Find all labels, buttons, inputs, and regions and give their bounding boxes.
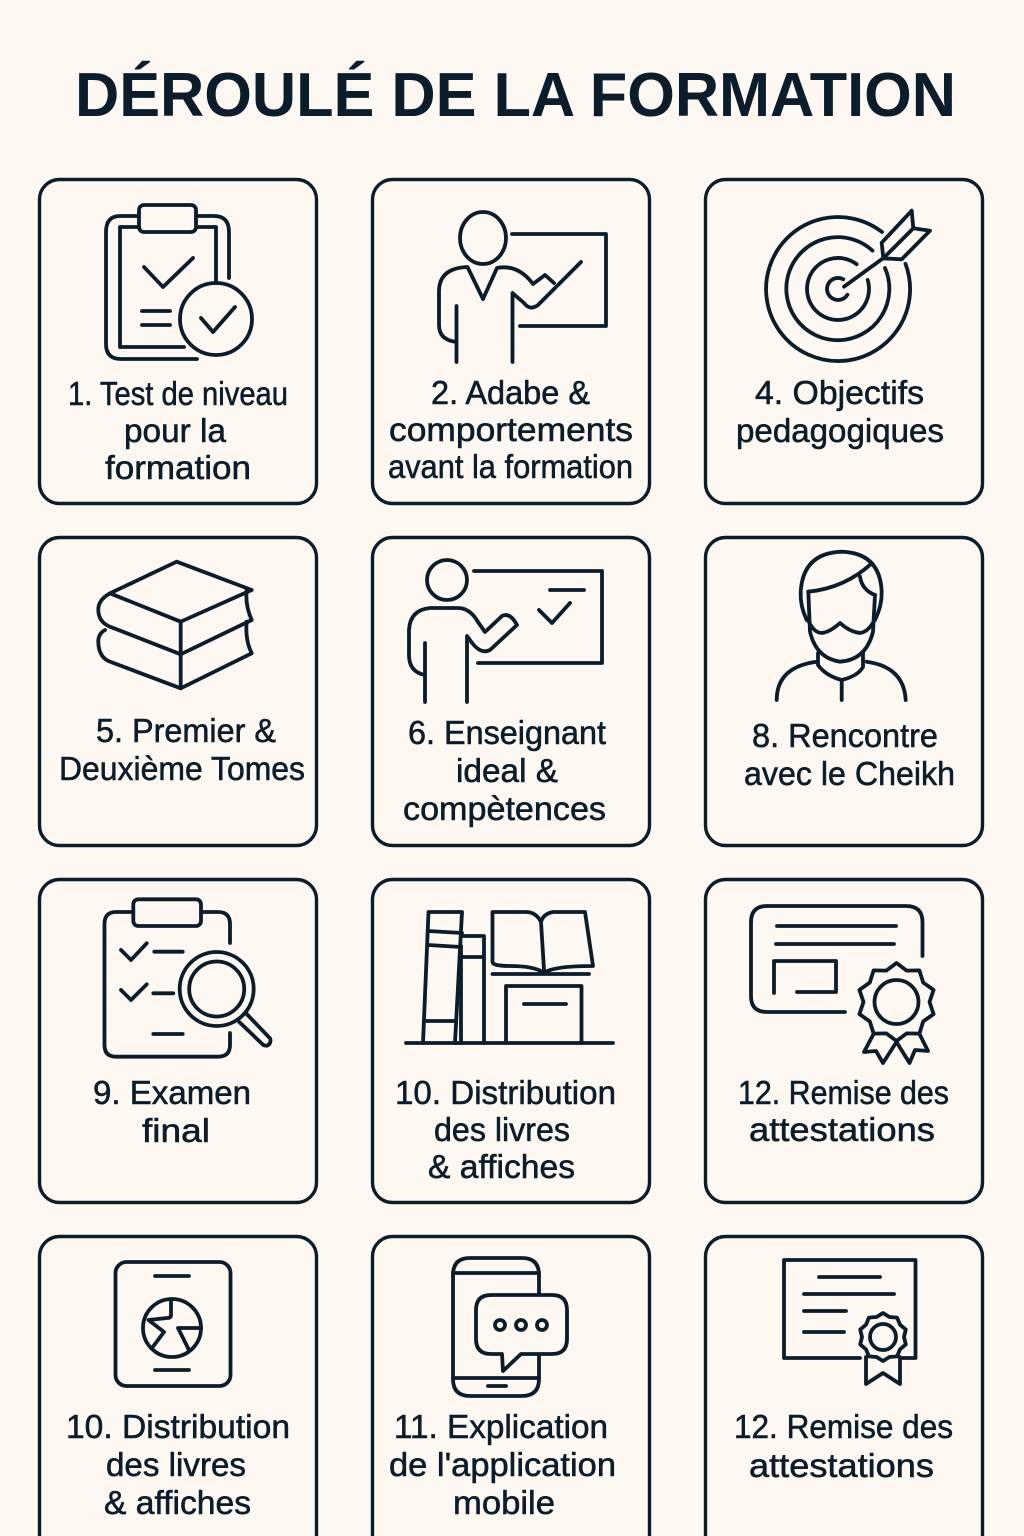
- label: objectifs pedagogiques: [736, 374, 944, 449]
- icon: books and open book on shelf: [406, 912, 613, 1043]
- label: distribution des livres: 10. Distribution: [395, 1074, 616, 1111]
- panel: 6. enseignant ideal: [372, 538, 650, 846]
- panel: 10. distribution des livres, tablet: [40, 1236, 316, 1536]
- label: explication de l'application mobile: mobile: [453, 1484, 555, 1521]
- label: rencontre avec le cheikh: [744, 717, 955, 792]
- icon: target with arrow: [766, 211, 930, 361]
- label: objectifs pedagogiques: pedagogiques: [736, 412, 944, 449]
- label: remise des attestations: 12. Remise des: [734, 1408, 953, 1445]
- label: enseignant ideal: [403, 714, 606, 827]
- icon: bearded man: [777, 552, 906, 700]
- panel: 9. examen final: [40, 880, 316, 1202]
- icon: checklist with magnifier: [104, 899, 270, 1057]
- label: test de niveau: 1. Test de niveau: [68, 375, 288, 412]
- label: distribution des livres: & affiches: [428, 1148, 575, 1185]
- label: objectifs pedagogiques: 4. Objectifs: [755, 374, 924, 411]
- panel: 11. explication de l'application mobile: [372, 1236, 650, 1536]
- label: explication de l'application mobile: de l'application: [389, 1446, 616, 1483]
- label: examen final: final: [142, 1112, 210, 1149]
- panel: 5. premier et deuxième tomes: [40, 538, 316, 846]
- label: adabe et comportements: 2. Adabe &: [431, 374, 590, 411]
- icon: stacked books: [98, 562, 252, 688]
- label: remise des attestations: attestations: [749, 1111, 935, 1148]
- label: distribution des livres: [395, 1074, 616, 1185]
- icon: phone with chat bubble: [453, 1258, 567, 1396]
- panel: 12. remise des attestations, diploma: [706, 1236, 982, 1536]
- label: distribution des livres: des livres: [434, 1111, 570, 1148]
- label: examen final: [93, 1074, 251, 1149]
- title: DÉROULÉ DE LA FORMATION: [75, 61, 956, 130]
- label: enseignant ideal: 6. Enseignant: [408, 714, 606, 751]
- label: enseignant ideal: ideal &: [456, 752, 558, 789]
- panel: 2. adabe et comportements: [372, 180, 650, 504]
- label: enseignant ideal: compètences: [403, 790, 606, 827]
- label: adabe et comportements: comportements: [389, 411, 633, 448]
- label: explication de l'application mobile: [389, 1408, 616, 1521]
- panel: 10. distribution des livres: [372, 880, 650, 1202]
- label: distribution des livres: [66, 1408, 290, 1521]
- panel: 1. test de niveau: [40, 180, 316, 504]
- label: rencontre avec le cheikh: avec le Cheikh: [744, 755, 955, 792]
- panel: 8. rencontre avec le cheikh: [706, 538, 982, 846]
- label: explication de l'application mobile: 11. Explication: [394, 1408, 608, 1445]
- icon: teacher at board with check: [409, 560, 602, 702]
- icon: clipboard with check: [106, 205, 252, 359]
- label: test de niveau: formation: [105, 449, 251, 486]
- label: adabe et comportements: avant la formation: [388, 448, 633, 485]
- label: remise des attestations: [734, 1408, 953, 1484]
- icon: tablet with globe: [116, 1262, 230, 1386]
- icon: certificate card with medal: [751, 906, 934, 1063]
- panel: 12. remise des attestations: [706, 880, 982, 1202]
- label: test de niveau: [68, 375, 288, 486]
- label: examen final: 9. Examen: [93, 1074, 251, 1111]
- icon: presenter at board: [439, 212, 606, 362]
- label: distribution des livres: 10. Distribution: [66, 1408, 290, 1445]
- label: remise des attestations: 12. Remise des: [738, 1074, 949, 1111]
- label: rencontre avec le cheikh: 8. Rencontre: [752, 717, 938, 754]
- label: test de niveau: pour la: [124, 412, 227, 449]
- label: remise des attestations: attestations: [749, 1447, 934, 1484]
- panel: 4. objectifs pedagogiques: [706, 180, 982, 504]
- label: premier et deuxième tomes: [59, 712, 305, 787]
- label: adabe et comportements: [388, 374, 633, 485]
- label: distribution des livres: des livres: [106, 1446, 246, 1483]
- icon: diploma with seal: [784, 1260, 916, 1384]
- label: premier et deuxième tomes: Deuxième Tomes: [59, 750, 305, 787]
- label: premier et deuxième tomes: 5. Premier &: [96, 712, 276, 749]
- label: distribution des livres: & affiches: [104, 1484, 251, 1521]
- label: remise des attestations: [738, 1074, 949, 1148]
